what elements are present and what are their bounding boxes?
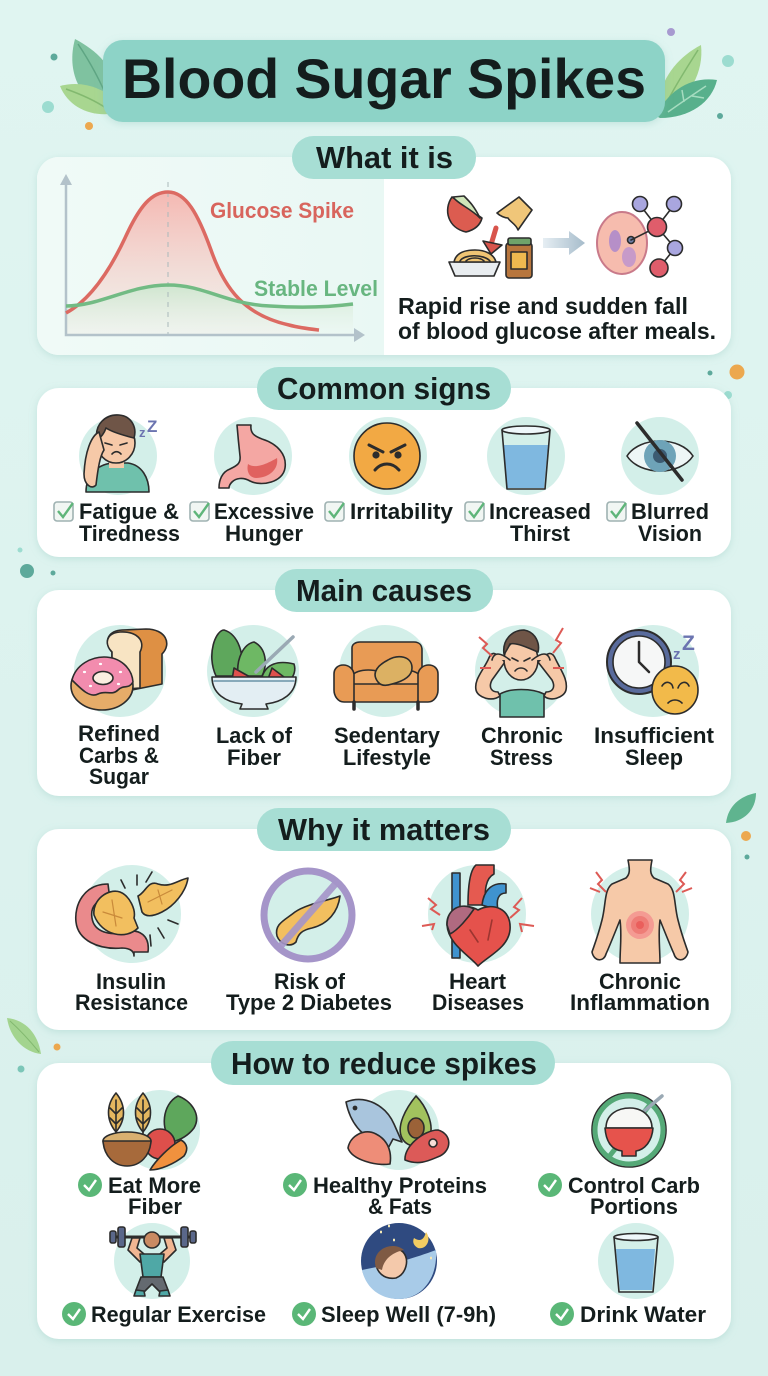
consequence: type 2 diabetes bbox=[261, 868, 355, 962]
tip: drink water bbox=[598, 1223, 674, 1299]
decorative dots bbox=[18, 28, 751, 1072]
heading: why it matters: Why it matters bbox=[278, 812, 490, 847]
check icons bbox=[62, 1173, 574, 1326]
cause labels: Chronic bbox=[481, 723, 563, 748]
panel: why it matters bbox=[37, 829, 731, 1030]
consequence labels: Risk of bbox=[274, 969, 346, 994]
consequence labels: Resistance bbox=[75, 990, 188, 1015]
heading: what it is bbox=[292, 136, 476, 179]
cause: insufficient sleep bbox=[607, 625, 699, 717]
heading: main causes: Main causes bbox=[296, 573, 472, 608]
sign labels: Tiredness bbox=[79, 521, 180, 546]
panel: how to reduce spikes bbox=[37, 1063, 731, 1339]
tip: healthy proteins and fats bbox=[346, 1090, 449, 1170]
cause: refined carbs bbox=[71, 625, 167, 717]
cause labels: Sugar bbox=[89, 764, 149, 789]
title: Blood Sugar Spikes bbox=[122, 47, 646, 110]
text block: definition: Rapid rise and sudden fall bbox=[398, 293, 688, 319]
tip labels: & Fats bbox=[368, 1194, 432, 1219]
sign labels: Blurred bbox=[631, 499, 709, 524]
tip labels: Sleep Well (7-9h) bbox=[321, 1302, 496, 1327]
sign labels: Vision bbox=[638, 521, 702, 546]
cause labels: Refined bbox=[78, 721, 160, 746]
sign: fatigue: Z bbox=[147, 417, 157, 436]
cause: insufficient sleep: Z bbox=[682, 632, 695, 655]
decorative leaves: title right bbox=[656, 45, 717, 118]
heading: why it matters bbox=[257, 808, 511, 851]
cause labels bbox=[78, 721, 715, 789]
tip labels: Portions bbox=[590, 1194, 678, 1219]
tip: regular exercise bbox=[110, 1223, 196, 1299]
cause: lack of fiber bbox=[207, 625, 299, 717]
consequence labels: Diseases bbox=[432, 990, 524, 1015]
sign labels bbox=[79, 499, 709, 546]
heading: main causes bbox=[275, 569, 493, 612]
tip labels: Regular Exercise bbox=[91, 1302, 266, 1327]
cause labels: Lack of bbox=[216, 723, 293, 748]
sign: irritability face bbox=[349, 417, 427, 495]
cause: sedentary lifestyle bbox=[334, 625, 438, 717]
icon: cell and glucose molecule bbox=[597, 196, 682, 277]
consequence labels: Insulin bbox=[96, 969, 166, 994]
panel: what it is bbox=[37, 157, 731, 355]
tip labels: Drink Water bbox=[580, 1302, 706, 1327]
sign labels: Excessive bbox=[214, 499, 314, 524]
text block: definition bbox=[398, 293, 716, 344]
consequence labels: Inflammation bbox=[570, 990, 710, 1015]
cause: insufficient sleep: z bbox=[673, 646, 680, 663]
consequence labels bbox=[75, 969, 710, 1015]
chart: glucose spike vs stable level: Stable Level bbox=[254, 276, 378, 301]
tip labels: Control Carb bbox=[568, 1173, 700, 1198]
cause labels: Carbs & bbox=[79, 743, 159, 768]
tip: control carb portions bbox=[592, 1093, 666, 1167]
tip labels bbox=[91, 1173, 706, 1327]
cause labels: Insufficient bbox=[594, 723, 715, 748]
sign: fatigue bbox=[79, 415, 157, 495]
tip labels: Eat More bbox=[108, 1173, 201, 1198]
chart: glucose spike vs stable level bbox=[37, 157, 384, 355]
sign labels: Fatigue & bbox=[79, 499, 179, 524]
panel: common signs bbox=[37, 388, 731, 557]
heading: common signs: Common signs bbox=[277, 371, 491, 406]
consequence labels: Heart bbox=[449, 969, 507, 994]
cause: chronic stress bbox=[475, 625, 567, 717]
consequence: heart diseases bbox=[422, 865, 534, 966]
tip labels: Fiber bbox=[128, 1194, 182, 1219]
heading: how to reduce spikes: How to reduce spikes bbox=[231, 1046, 537, 1081]
consequence labels: Chronic bbox=[599, 969, 681, 994]
sign: blurred vision eye bbox=[621, 417, 699, 495]
consequence: chronic inflammation bbox=[590, 860, 692, 963]
arrow bbox=[543, 231, 585, 255]
tip: sleep well bbox=[361, 1223, 437, 1299]
cause labels: Lifestyle bbox=[343, 745, 431, 770]
sign labels: Thirst bbox=[510, 521, 571, 546]
cause labels: Sedentary bbox=[334, 723, 441, 748]
icon: meal foods bbox=[448, 196, 532, 278]
checkboxes bbox=[54, 502, 626, 521]
sign: thirst glass bbox=[487, 417, 565, 495]
decorative leaf: left lower bbox=[7, 1018, 41, 1054]
tip: eat more fiber bbox=[103, 1090, 200, 1170]
heading: what it is: What it is bbox=[316, 140, 453, 175]
panel: main causes bbox=[37, 590, 731, 796]
consequence: insulin resistance bbox=[76, 865, 188, 963]
cause labels: Fiber bbox=[227, 745, 281, 770]
sign labels: Irritability bbox=[350, 499, 454, 524]
cause labels: Stress bbox=[490, 745, 553, 770]
tip labels: Healthy Proteins bbox=[313, 1173, 487, 1198]
chart: glucose spike vs stable level: Glucose Spike bbox=[210, 198, 354, 223]
consequence labels: Type 2 Diabetes bbox=[226, 990, 392, 1015]
sign: fatigue: z bbox=[139, 425, 146, 440]
sign labels: Increased bbox=[489, 499, 591, 524]
text block: definition: of blood glucose after meals. bbox=[398, 318, 716, 344]
decorative leaf: right middle bbox=[726, 793, 756, 823]
sign: stomach bbox=[214, 417, 292, 495]
cause labels: Sleep bbox=[625, 745, 683, 770]
sign labels: Hunger bbox=[225, 521, 303, 546]
decorative leaves: title left bbox=[60, 39, 118, 114]
